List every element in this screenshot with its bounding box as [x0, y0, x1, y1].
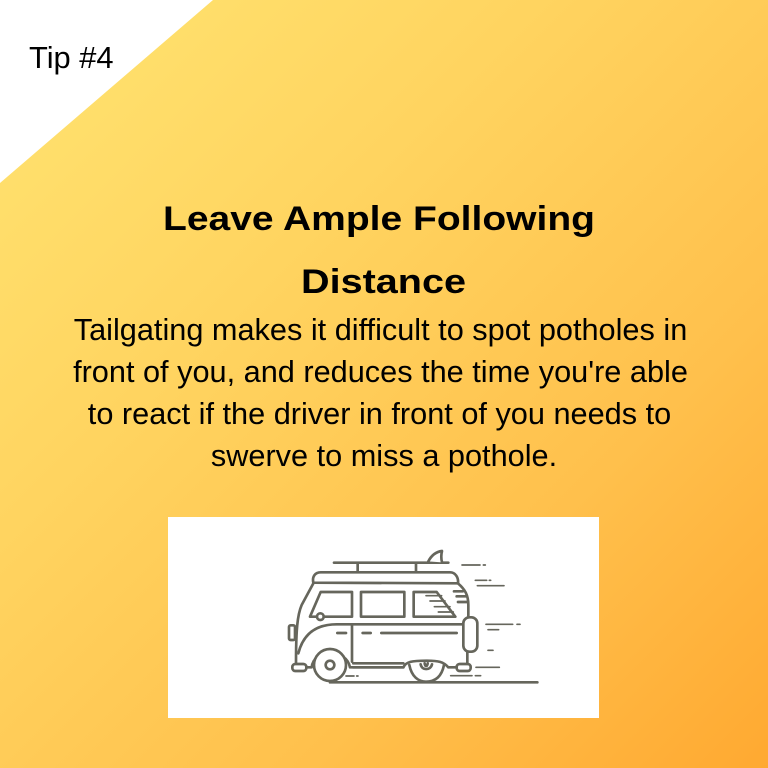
white corner triangle	[0, 0, 213, 183]
speed lines	[346, 565, 520, 676]
wheels	[314, 649, 346, 681]
side stripes	[337, 629, 457, 637]
body text: Tailgating makes it difficult to spot potholes in	[74, 312, 687, 347]
title: Distance	[301, 263, 466, 301]
body text: swerve to miss a pothole.	[211, 438, 557, 473]
body text	[73, 312, 688, 473]
title	[163, 200, 595, 301]
body text: to react if the driver in front of you needs to	[88, 396, 671, 431]
road	[330, 678, 537, 686]
icon: camper van with surfboard	[288, 550, 539, 684]
body	[296, 583, 313, 663]
title: Leave Ample Following	[163, 200, 595, 238]
roof rack	[334, 563, 448, 572]
image panel with van	[168, 517, 599, 718]
tip label: Tip #4	[29, 40, 114, 75]
body text: front of you, and reduces the time you're able	[73, 354, 688, 389]
bumper and mirror	[463, 617, 477, 652]
roof	[313, 572, 458, 583]
lower body	[306, 653, 457, 667]
windows	[310, 592, 352, 617]
